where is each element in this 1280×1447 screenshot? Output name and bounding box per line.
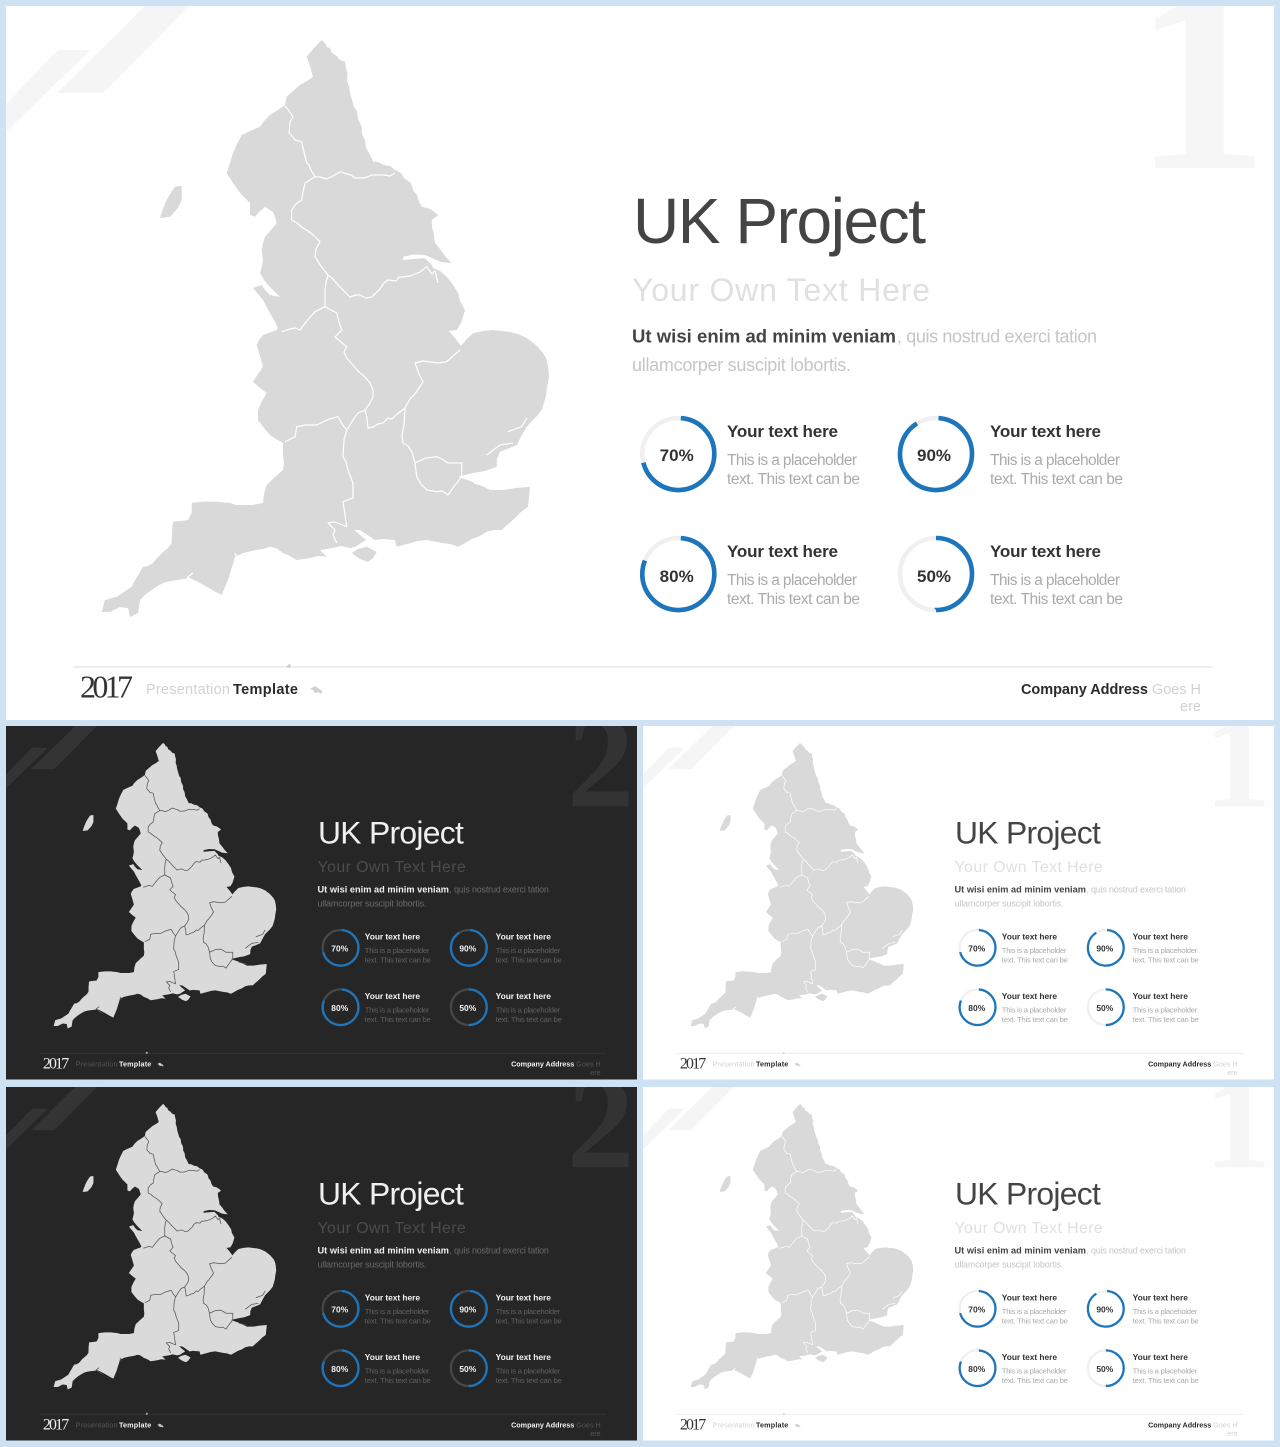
corner diagonal stripes <box>6 726 97 788</box>
footer right: company address: Goes H <box>1213 1421 1238 1430</box>
stat: 50%: text. This text can be <box>990 591 1123 608</box>
stat: 90%: 90% <box>917 446 951 465</box>
footer left: 2017 <box>43 1416 69 1433</box>
stat: 70%: Your text here <box>365 931 420 941</box>
footer left: Presentation <box>713 1421 754 1430</box>
stat: 90%: text. This text can be <box>1133 956 1199 965</box>
stat: 80%: 80% <box>331 1364 349 1374</box>
footer left: Presentation <box>76 1421 117 1430</box>
subtitle: Your Own Text Here <box>632 272 930 308</box>
corner diagonal stripes <box>6 6 189 132</box>
stat: 80%: text. This text can be <box>365 1015 431 1024</box>
intro text: Ut wisi enim ad minim veniam <box>318 1246 449 1256</box>
stat: 80% <box>321 988 431 1026</box>
footer right: company address <box>1021 682 1201 715</box>
stat: 80%: Your text here <box>1002 1352 1057 1362</box>
map of England regions <box>691 1104 913 1390</box>
stat: 70%: Your text here <box>1002 1292 1057 1302</box>
stat: 50%: Your text here <box>496 991 551 1001</box>
stat: 70%: This is a placeholder <box>365 946 430 955</box>
stat: 70%: text. This text can be <box>1002 956 1068 965</box>
stat: 90%: Your text here <box>1133 1292 1188 1302</box>
title: UK Project <box>633 185 926 257</box>
stat: 70% <box>321 1290 431 1328</box>
stat: 90%: Your text here <box>1133 931 1188 941</box>
footer right: company address: ere <box>590 1068 601 1077</box>
stat: 70%: This is a placeholder <box>365 1307 430 1316</box>
stat: 70%: Your text here <box>365 1292 420 1302</box>
stat: 80%: Your text here <box>1002 991 1057 1001</box>
stat: 90%: 90% <box>1096 943 1114 953</box>
stat: 50%: Your text here <box>1133 991 1188 1001</box>
stat: 90%: This is a placeholder <box>1133 946 1198 955</box>
stat: 80%: This is a placeholder <box>1002 1367 1067 1376</box>
stat: 50%: This is a placeholder <box>496 1367 561 1376</box>
footer right: company address: Company Address <box>511 1421 574 1430</box>
footer right: company address: Goes H <box>576 1421 601 1430</box>
footer left: 2017 <box>680 1055 706 1072</box>
footer left: 2017 <box>80 668 133 704</box>
stat: 70%: Your text here <box>727 422 838 441</box>
stat: 80% <box>321 1349 431 1387</box>
footer left: Template <box>233 682 298 698</box>
stat: 80%: This is a placeholder <box>365 1367 430 1376</box>
stat: 90% <box>1087 1290 1199 1328</box>
map of England regions <box>691 743 913 1029</box>
stat: 70% <box>958 1290 1068 1328</box>
stat: 50%: This is a placeholder <box>1133 1006 1198 1015</box>
stat: 90%: Your text here <box>496 931 551 941</box>
stat: 90%: This is a placeholder <box>496 946 561 955</box>
stat: 80%: Your text here <box>727 542 838 561</box>
footer left <box>43 1413 163 1433</box>
stat: 70%: Your text here <box>1002 931 1057 941</box>
footer left: Template <box>756 1060 788 1069</box>
subtitle: Your Own Text Here <box>955 1220 1103 1237</box>
intro text: Ut wisi enim ad minim veniam <box>955 885 1086 895</box>
panel: small dark slide top <box>6 726 637 1080</box>
footer left: Template <box>756 1421 788 1430</box>
title: UK Project <box>318 814 464 850</box>
panel: small dark slide bottom <box>6 1087 637 1440</box>
footer right: company address: ere <box>1227 1068 1238 1077</box>
intro text <box>318 1246 549 1270</box>
footer right: company address <box>511 1060 601 1077</box>
stat: 70%: text. This text can be <box>365 956 431 965</box>
corner diagonal stripes <box>643 1087 734 1149</box>
stat: 90%: Your text here <box>496 1292 551 1302</box>
footer left <box>680 1052 800 1072</box>
stat: 50%: 50% <box>459 1003 477 1013</box>
stat: 50%: 50% <box>459 1364 477 1374</box>
intro text: , quis nostrud exerci tation <box>449 1246 549 1256</box>
footer left: Template <box>119 1060 151 1069</box>
intro text: ullamcorper suscipit lobortis. <box>632 355 851 375</box>
stat: 70%: text. This text can be <box>727 471 860 488</box>
footer left: Presentation <box>146 682 230 698</box>
footer right: company address: Company Address <box>1021 682 1148 698</box>
stat: 80%: text. This text can be <box>727 591 860 608</box>
intro text: ullamcorper suscipit lobortis. <box>955 1260 1064 1270</box>
footer left <box>43 1052 163 1072</box>
stat: 50%: 50% <box>917 567 951 586</box>
intro text: Ut wisi enim ad minim veniam <box>955 1246 1086 1256</box>
intro text: , quis nostrud exerci tation <box>449 885 549 895</box>
footer right: company address: ere <box>1180 699 1201 715</box>
stat: 70% <box>321 929 431 967</box>
footer left: Template <box>119 1421 151 1430</box>
stat: 80%: 80% <box>968 1364 986 1374</box>
stat: 50%: Your text here <box>990 542 1101 561</box>
subtitle: Your Own Text Here <box>955 859 1103 876</box>
subtitle: Your Own Text Here <box>318 1220 466 1237</box>
map of England regions <box>54 1104 276 1390</box>
stat: 90%: text. This text can be <box>1133 1317 1199 1326</box>
panel: large light slide <box>6 6 1274 720</box>
stat: 70%: This is a placeholder <box>727 452 857 469</box>
footer right: company address: ere <box>590 1429 601 1438</box>
stat: 50%: Your text here <box>496 1352 551 1362</box>
stat: 80%: Your text here <box>365 1352 420 1362</box>
stat: 90%: Your text here <box>990 422 1101 441</box>
footer left <box>80 664 322 704</box>
stat: 70%: text. This text can be <box>365 1317 431 1326</box>
stat: 90%: This is a placeholder <box>990 452 1120 469</box>
stat: 80% <box>640 536 860 612</box>
stat: 80%: text. This text can be <box>1002 1015 1068 1024</box>
stat: 70%: 70% <box>331 1304 349 1314</box>
stat: 90%: text. This text can be <box>990 471 1123 488</box>
stat: 70%: text. This text can be <box>1002 1317 1068 1326</box>
intro text: Ut wisi enim ad minim veniam <box>632 326 896 346</box>
stat: 70%: 70% <box>331 943 349 953</box>
intro text <box>955 1246 1186 1270</box>
stat: 50%: This is a placeholder <box>990 572 1120 589</box>
stat: 50%: text. This text can be <box>1133 1376 1199 1385</box>
stat: 80%: 80% <box>331 1003 349 1013</box>
intro text: , quis nostrud exerci tation <box>1086 885 1186 895</box>
stat: 50% <box>900 538 1123 610</box>
stat: 70%: This is a placeholder <box>1002 946 1067 955</box>
stat: 80%: text. This text can be <box>1002 1376 1068 1385</box>
stat: 90%: text. This text can be <box>496 1317 562 1326</box>
intro text: , quis nostrud exerci tation <box>897 326 1097 346</box>
stat: 50%: This is a placeholder <box>496 1006 561 1015</box>
stat: 50%: 50% <box>1096 1003 1114 1013</box>
footer right: company address: Company Address <box>1148 1421 1211 1430</box>
subtitle: Your Own Text Here <box>318 859 466 876</box>
stat: 50%: text. This text can be <box>1133 1015 1199 1024</box>
title: UK Project <box>955 1175 1101 1211</box>
stat: 50%: This is a placeholder <box>1133 1367 1198 1376</box>
stat: 80%: text. This text can be <box>365 1376 431 1385</box>
stat: 70% <box>958 929 1068 967</box>
stat: 90%: text. This text can be <box>496 956 562 965</box>
panel: small light slide top <box>643 726 1274 1080</box>
intro text: ullamcorper suscipit lobortis. <box>318 1260 427 1270</box>
stat: 90% <box>450 929 562 967</box>
stat: 80%: This is a placeholder <box>365 1006 430 1015</box>
stat: 70%: This is a placeholder <box>1002 1307 1067 1316</box>
footer right: company address <box>1148 1421 1238 1438</box>
stat: 90% <box>1087 929 1199 967</box>
stat: 50%: 50% <box>1096 1364 1114 1374</box>
stat: 50% <box>1088 1350 1199 1386</box>
footer left: Presentation <box>713 1060 754 1069</box>
stat: 90% <box>450 1290 562 1328</box>
stat: 90%: 90% <box>459 943 477 953</box>
stat: 50% <box>451 989 562 1025</box>
footer right: company address: Goes H <box>1152 682 1201 698</box>
stat: 50% <box>451 1350 562 1386</box>
intro text: , quis nostrud exerci tation <box>1086 1246 1186 1256</box>
footer left: 2017 <box>43 1055 69 1072</box>
stat: 50% <box>1088 989 1199 1025</box>
intro text <box>632 326 1097 375</box>
title: UK Project <box>955 814 1101 850</box>
footer right: company address: Company Address <box>511 1060 574 1069</box>
stat: 50%: Your text here <box>1133 1352 1188 1362</box>
stat: 90%: This is a placeholder <box>496 1307 561 1316</box>
stat: 80%: 80% <box>968 1003 986 1013</box>
stat: 80%: 80% <box>660 567 694 586</box>
footer right: company address <box>1148 1060 1238 1077</box>
stat: 80%: This is a placeholder <box>1002 1006 1067 1015</box>
stat: 90%: 90% <box>1096 1304 1114 1314</box>
intro text: ullamcorper suscipit lobortis. <box>318 899 427 909</box>
stat: 80% <box>958 1349 1068 1387</box>
intro text <box>955 885 1186 909</box>
corner diagonal stripes <box>643 726 734 788</box>
stat: 90% <box>898 416 1123 492</box>
intro text: ullamcorper suscipit lobortis. <box>955 899 1064 909</box>
footer left: 2017 <box>680 1416 706 1433</box>
stat: 90%: This is a placeholder <box>1133 1307 1198 1316</box>
intro text: Ut wisi enim ad minim veniam <box>318 885 449 895</box>
footer right: company address: Goes H <box>1213 1060 1238 1069</box>
stat: 50%: text. This text can be <box>496 1015 562 1024</box>
intro text <box>318 885 549 909</box>
footer right: company address: Goes H <box>576 1060 601 1069</box>
footer right: company address <box>511 1421 601 1438</box>
stat: 80%: Your text here <box>365 991 420 1001</box>
stat: 90%: 90% <box>459 1304 477 1314</box>
stat: 70%: 70% <box>968 943 986 953</box>
stat: 80% <box>958 988 1068 1026</box>
footer right: company address: Company Address <box>1148 1060 1211 1069</box>
stat: 80%: This is a placeholder <box>727 572 857 589</box>
stat: 70%: 70% <box>660 446 694 465</box>
stat: 50%: text. This text can be <box>496 1376 562 1385</box>
map of England regions <box>102 40 549 617</box>
stat: 70%: 70% <box>968 1304 986 1314</box>
corner diagonal stripes <box>6 1087 97 1149</box>
stat: 70% <box>640 416 860 492</box>
title: UK Project <box>318 1175 464 1211</box>
footer left <box>680 1413 800 1433</box>
footer left: Presentation <box>76 1060 117 1069</box>
footer right: company address: ere <box>1227 1429 1238 1438</box>
panel: small light slide bottom <box>643 1087 1274 1440</box>
map of England regions <box>54 743 276 1029</box>
